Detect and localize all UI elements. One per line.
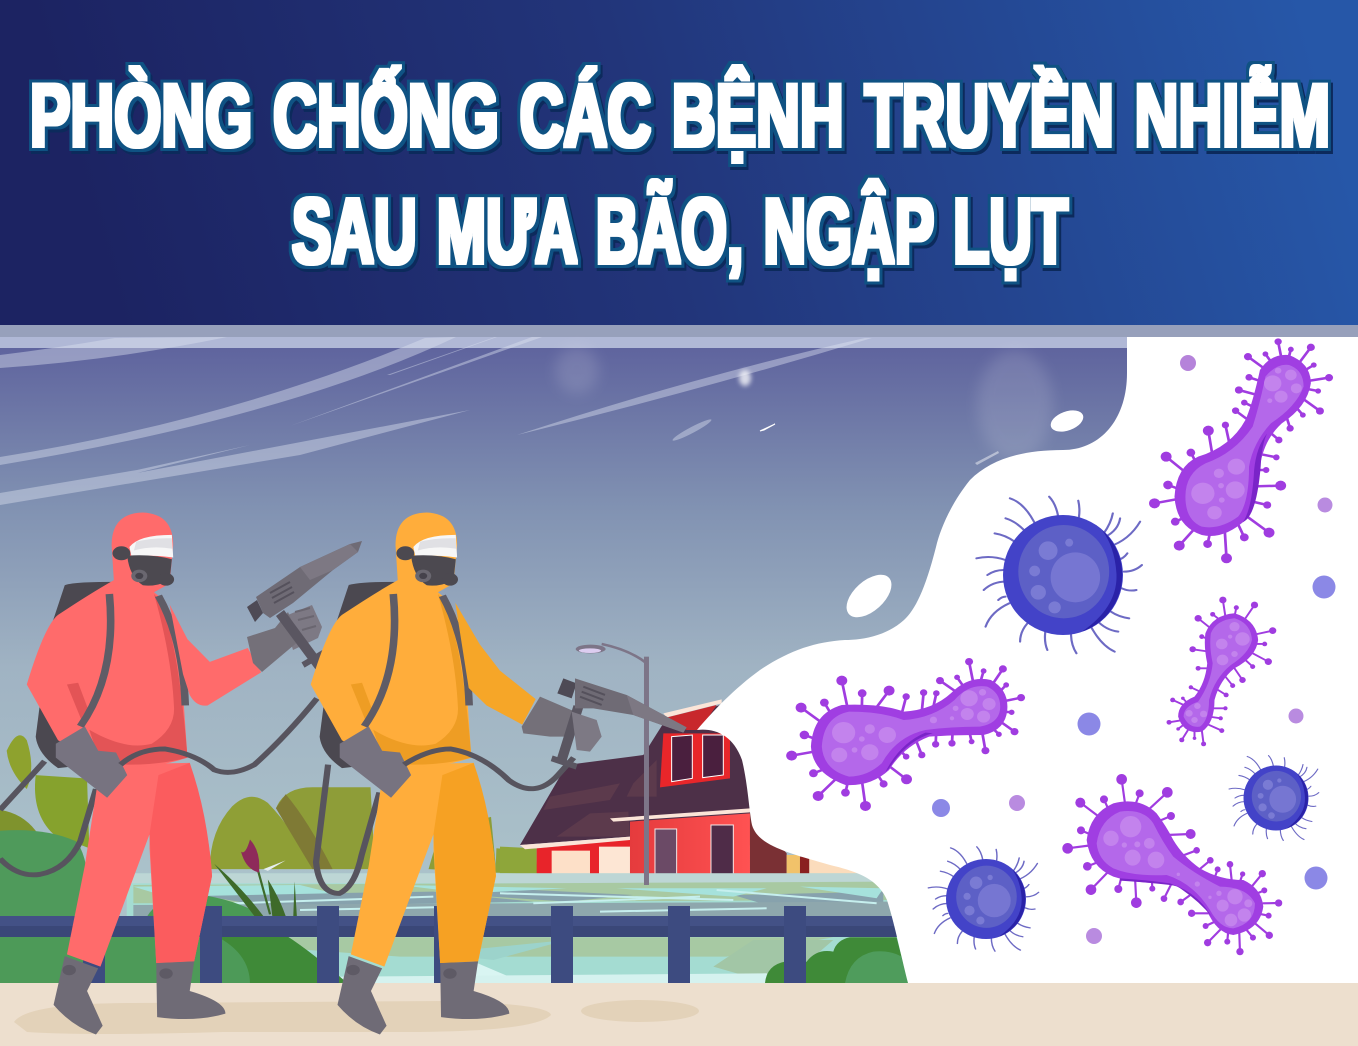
yellow suit body — [311, 513, 574, 1034]
virus: large blue — [976, 497, 1142, 653]
ground — [0, 983, 1358, 1046]
fence — [0, 906, 900, 983]
ground shadows — [14, 1000, 699, 1034]
virus: purple bottom — [1062, 774, 1282, 955]
flood water — [127, 873, 907, 983]
virus: small blue lower left — [928, 847, 1039, 951]
sky bands and wind streaks — [0, 325, 1358, 505]
yellow worker spray gun — [522, 678, 687, 767]
panel: title header background — [0, 0, 1358, 325]
house partly flooded — [500, 699, 859, 885]
landscape: hills, plants and bushes — [0, 735, 538, 918]
virus: purple small right — [1167, 597, 1276, 746]
virus: small blue right — [1229, 756, 1319, 840]
white disinfectant cloud — [697, 337, 1358, 983]
white droplets — [839, 406, 1086, 625]
virus: purple horizontal — [786, 658, 1025, 811]
red worker spray gun — [247, 541, 362, 672]
bushes and flower behind fence — [0, 839, 348, 984]
panel: sky background — [0, 337, 1358, 983]
floating spore dots — [932, 355, 1336, 944]
red suit body — [0, 513, 317, 1034]
figure: worker in red suit — [0, 513, 362, 1034]
green bush right of fence — [765, 937, 908, 983]
street lamp — [576, 644, 649, 885]
virus: purple top right — [1149, 338, 1333, 563]
figure: worker in yellow suit — [311, 513, 687, 1034]
